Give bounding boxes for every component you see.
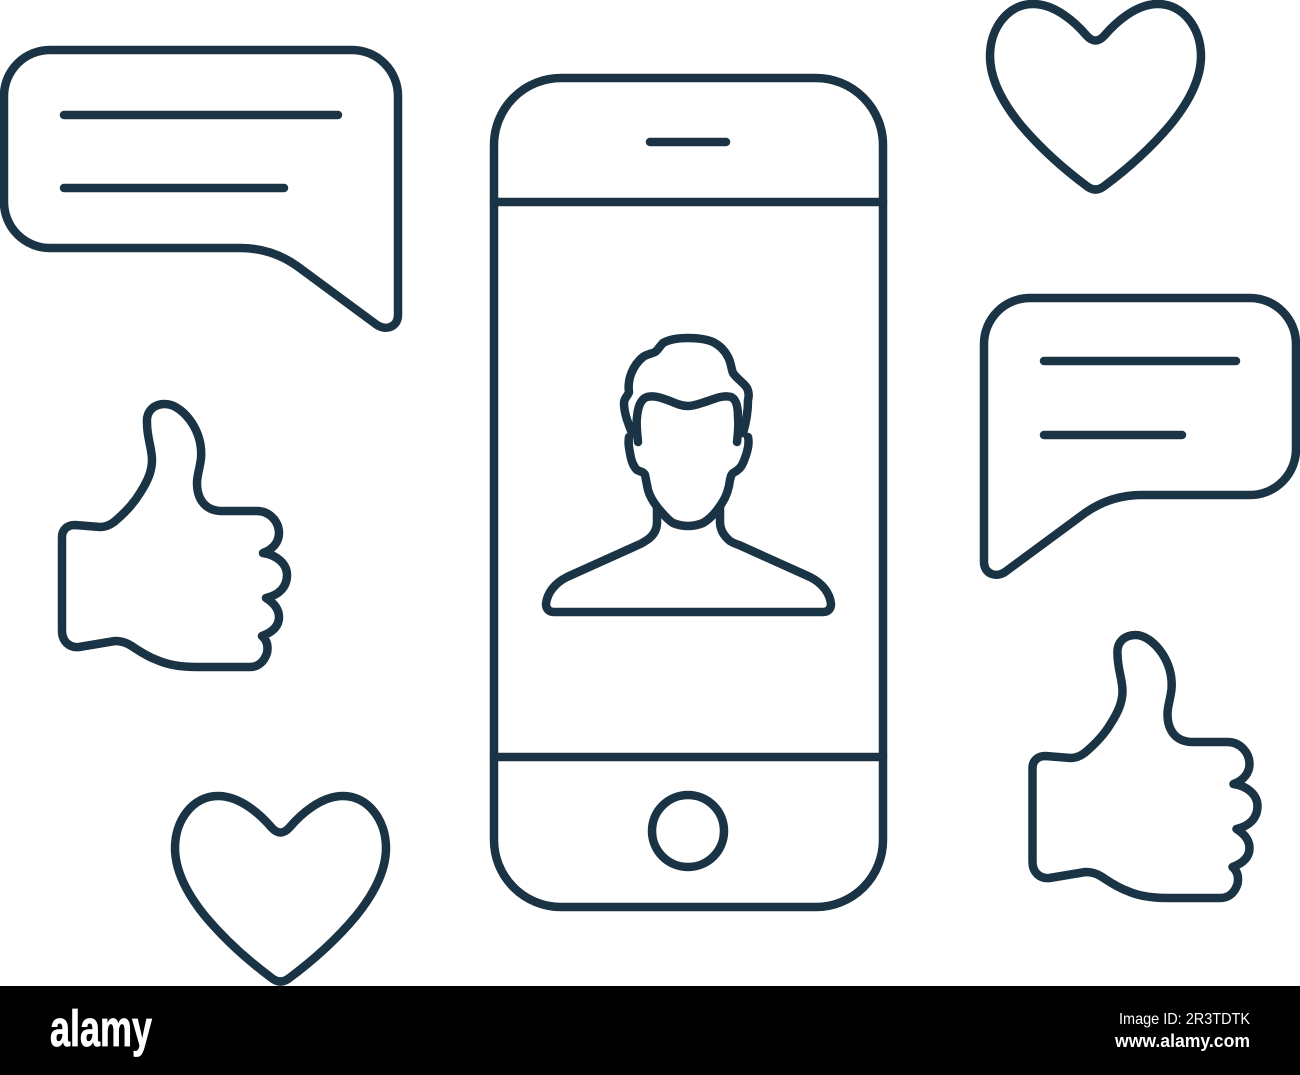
heart: bottom left [175,796,386,982]
footer image id: Image ID: 2R3TDTK [1119,1011,1250,1028]
footer logo: alamy: alamy [50,1000,152,1057]
footer website: www.alamy.com [1114,1031,1250,1051]
speech bubble: right [984,298,1296,575]
icon: thumbs up right [1032,635,1258,898]
smartphone [494,78,883,907]
heart: top right [990,4,1201,190]
speech bubble: top left [4,50,398,328]
icon: thumbs up left [62,404,287,667]
icon: user portrait [546,338,831,612]
footer bar [0,986,1300,1075]
